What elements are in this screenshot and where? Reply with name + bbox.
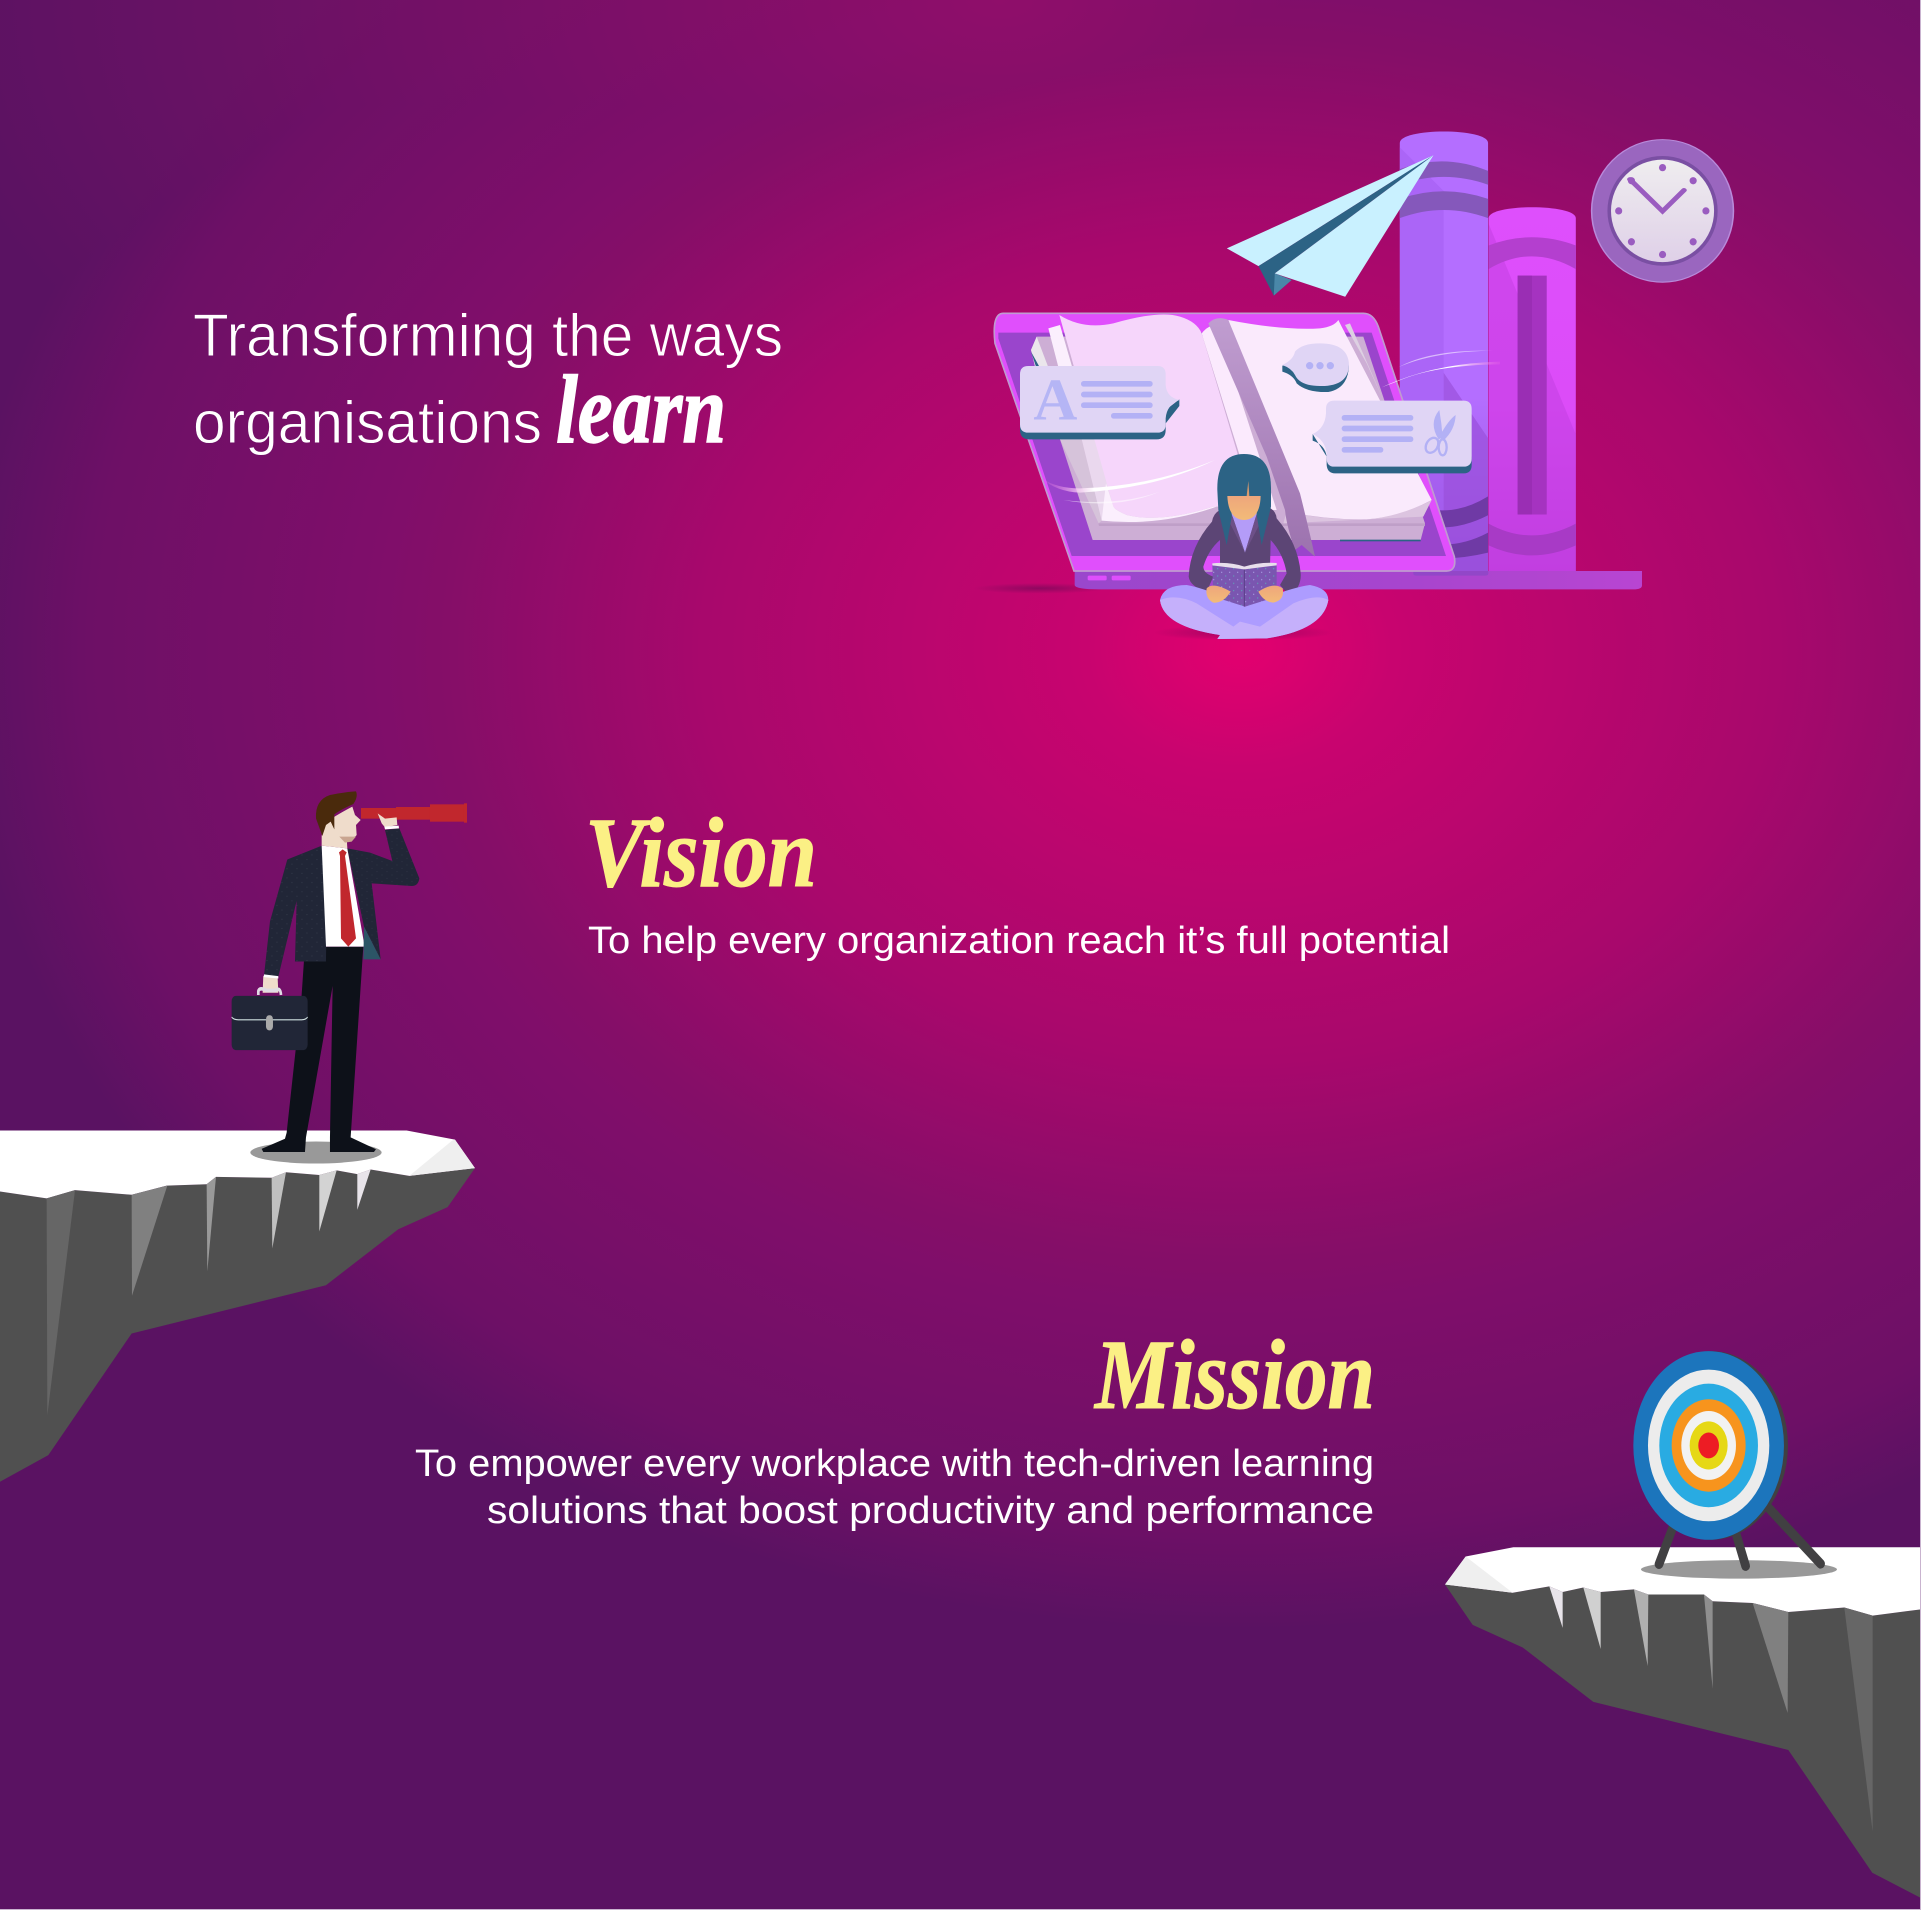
floor shadow [973,583,1107,594]
lower body and briefcase [232,846,382,1164]
open book [1031,314,1432,557]
icon: paper plane [1227,155,1433,297]
illustration: books, paper plane and clock [1227,131,1733,574]
jacket lining [363,927,381,959]
upper body and head [316,791,467,959]
icon: wall clock [1592,140,1733,282]
title line 2: organisations [193,389,542,456]
light swooshes [1042,351,1500,504]
figure: woman reading [1153,454,1333,641]
blouse [1232,514,1257,553]
vision text: To help every organization reach it’s full potential [588,920,1450,962]
illustration: laptop, open book and reader [973,313,1642,641]
illustration: right cliff with target [1445,1351,1921,1898]
figure: businessman with telescope [232,791,467,1164]
hair [1217,454,1271,545]
speech bubble: letter A: A [1033,366,1077,432]
underlying pages [1048,325,1074,373]
right page [1228,320,1432,519]
face [1227,496,1261,520]
hands [1206,586,1231,603]
icon: purple book [1400,131,1488,574]
laptop base [1075,571,1642,589]
speech bubble: letter A [1020,366,1179,439]
hair [316,791,357,836]
mission heading: Mission [1093,1319,1375,1430]
speech bubble: scissors [1313,401,1472,473]
cliff [1445,1547,1921,1898]
ribbon [1208,318,1315,557]
page block [1031,337,1425,540]
telescope [361,803,467,823]
jacket arm [347,828,419,959]
hand and cuff [378,813,397,827]
shirt [322,846,365,947]
speech bubble: dots [1282,343,1349,392]
held book [1212,564,1277,607]
mission text [415,1443,1374,1532]
vision heading: Vision [585,797,817,908]
jacket [1189,508,1301,597]
laptop screen [994,313,1455,571]
icon: pink book [1489,207,1576,572]
left page [1059,314,1253,518]
title accent word: learn [556,356,726,464]
illustration: left cliff [0,1130,475,1482]
mission text: To empower every workplace with tech-driven learning [415,1443,1374,1485]
title line 1: Transforming the ways [193,302,783,369]
legs [1160,585,1328,639]
tie [339,849,356,947]
face [322,807,361,848]
mission text: solutions that boost productivity and performance [487,1490,1374,1532]
icon: archery target [1633,1351,1837,1579]
title: transforming the ways organisations learn [193,302,783,464]
